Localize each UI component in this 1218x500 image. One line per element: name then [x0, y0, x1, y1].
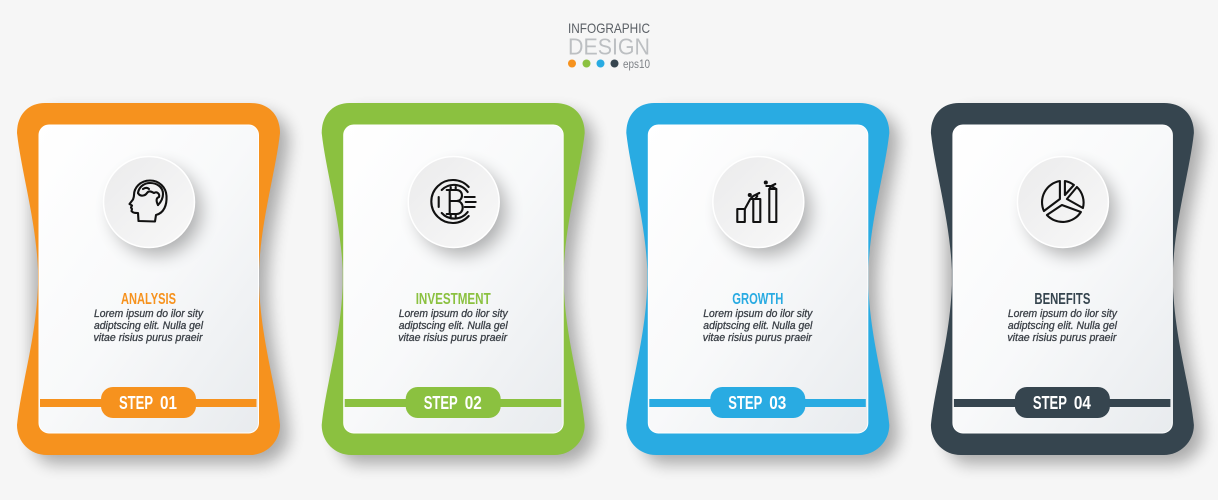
step pill [1015, 387, 1110, 418]
heading: ANALYSIS [121, 291, 176, 308]
step pill [406, 387, 501, 418]
white inner card [39, 125, 258, 433]
logo line: INFOGRAPHIC: INFOGRAPHIC [568, 20, 650, 36]
body text [1007, 308, 1118, 344]
icon: growth bars with climbers [737, 182, 776, 222]
step label: 04 [1074, 393, 1091, 413]
body text: Lorem ipsum do ilor sity [399, 308, 508, 320]
step label: STEP [119, 393, 153, 413]
circle shadow [113, 167, 201, 255]
body text: Lorem ipsum do ilor sity [94, 308, 204, 320]
white inner card [953, 125, 1172, 433]
icon: bitcoin [431, 180, 476, 223]
logo label: eps10: eps10 [623, 59, 650, 71]
icon: pie chart [1042, 181, 1084, 222]
body text: vitae risius purus praeir [1007, 332, 1117, 344]
body text: adiptscing elit. Nulla gel [703, 320, 813, 332]
icon: head with brain [130, 180, 167, 222]
step bar [40, 399, 256, 407]
step label: STEP [424, 393, 458, 413]
step label: 03 [769, 393, 786, 413]
white inner card [648, 125, 868, 433]
icon badge [104, 156, 194, 248]
icon badge [1017, 156, 1108, 248]
icon badge [408, 156, 499, 248]
coloured frame [322, 103, 585, 455]
heading: BENEFITS [1034, 291, 1091, 308]
step pill [101, 387, 196, 418]
body text: adiptscing elit. Nulla gel [1008, 320, 1118, 332]
panel: step 02 investment [322, 103, 594, 464]
panel: step 01 analysis [17, 103, 289, 464]
card shadow [641, 112, 898, 464]
step bar [649, 399, 866, 407]
body text [94, 308, 204, 344]
step pill [710, 387, 805, 418]
step bar [954, 399, 1170, 407]
body text [703, 308, 813, 344]
panel: step 03 growth [626, 103, 898, 464]
card shadow [946, 112, 1203, 464]
circle shadow [1027, 167, 1115, 255]
card shadow [32, 112, 289, 464]
step label: 02 [465, 393, 482, 413]
circle shadow [722, 167, 810, 255]
step label: STEP [728, 393, 762, 413]
body text: Lorem ipsum do ilor sity [1008, 308, 1118, 320]
body text: adiptscing elit. Nulla gel [94, 320, 204, 332]
heading: GROWTH [732, 291, 783, 308]
card shadow [337, 112, 594, 464]
body text: adiptscing elit. Nulla gel [399, 320, 508, 332]
logo line: DESIGN: DESIGN [568, 34, 650, 60]
coloured frame [17, 103, 280, 455]
body text: Lorem ipsum do ilor sity [703, 308, 813, 320]
coloured frame [931, 103, 1194, 455]
step label: 01 [160, 393, 177, 413]
heading: INVESTMENT [416, 291, 491, 308]
body text: vitae risius purus praeir [703, 332, 812, 344]
step label: STEP [1033, 393, 1067, 413]
body text: vitae risius purus praeir [398, 332, 508, 344]
white inner card [344, 125, 563, 433]
icon badge [713, 156, 804, 248]
coloured frame [626, 103, 889, 455]
header logo [568, 20, 650, 71]
logo colour dots [568, 60, 618, 68]
body text [398, 308, 508, 344]
circle shadow [418, 167, 506, 255]
body text: vitae risius purus praeir [94, 332, 203, 344]
panel: step 04 benefits [931, 103, 1203, 464]
step bar [345, 399, 561, 407]
